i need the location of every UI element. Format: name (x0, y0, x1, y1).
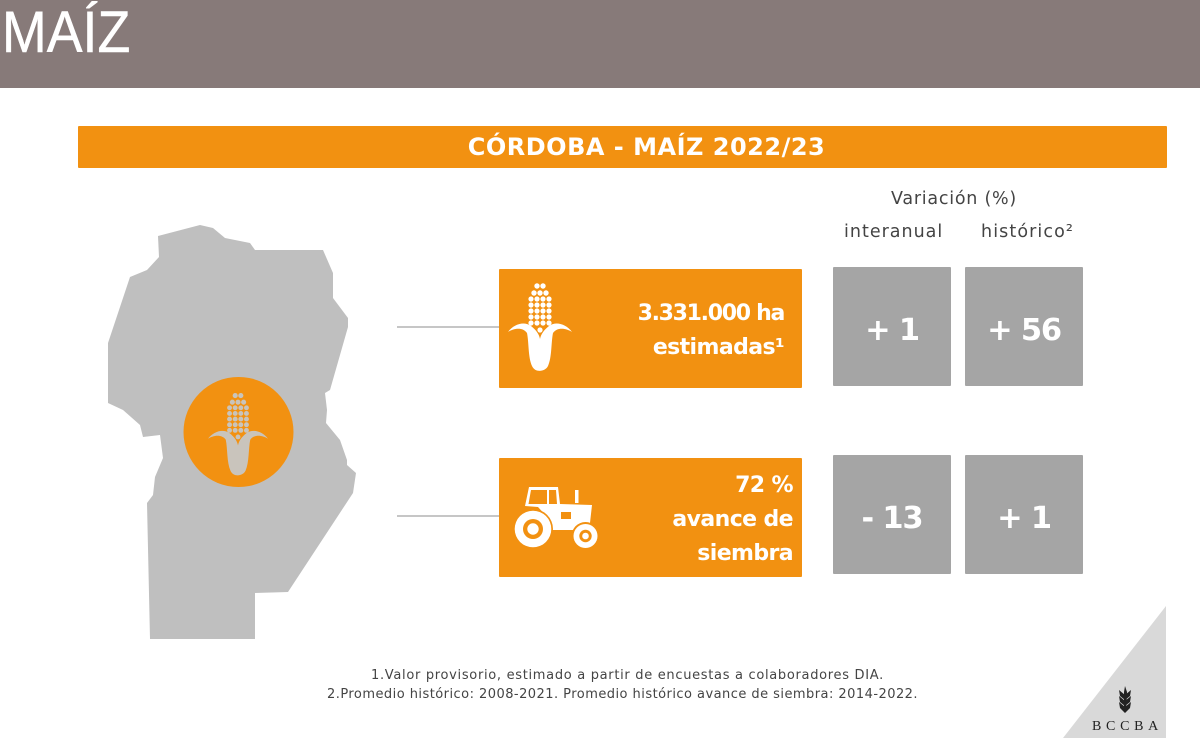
logo triangle and wheat (1063, 606, 1166, 738)
orange title bar: CÓRDOBA - MAÍZ 2022/23 (468, 133, 825, 161)
value box: interanual hectares: + 1 (865, 313, 919, 348)
hectares text: estimadas¹ (653, 335, 784, 360)
value box: histórico progress (965, 455, 1083, 574)
icon: corn (508, 283, 572, 371)
value box: histórico hectares (965, 267, 1083, 386)
orange title bar (78, 126, 1167, 168)
progress text (672, 473, 793, 566)
value box: interanual progress (833, 455, 951, 574)
progress text: avance de (672, 507, 793, 532)
connector line 2 (397, 515, 499, 517)
orange circle badge with corn (184, 377, 294, 487)
value box: histórico hectares: + 56 (987, 313, 1061, 348)
icon: tractor (514, 487, 598, 548)
panel: hectares (499, 269, 802, 388)
page title: MAÍZ (2, 0, 130, 65)
column label: interanual: interanual (844, 222, 943, 242)
footnotes: 1.Valor provisorio, estimado a partir de encuestas a colaboradores DIA. (371, 668, 884, 683)
header band (0, 0, 1200, 88)
variation header: Variación (%) (891, 189, 1017, 209)
footnotes: 2.Promedio histórico: 2008-2021. Promedio histórico avance de siembra: 2014-2022. (327, 687, 918, 702)
value box: interanual progress: - 13 (862, 501, 922, 536)
value box: histórico progress: + 1 (997, 501, 1051, 536)
connector line 1 (397, 326, 499, 328)
column label: histórico: histórico² (981, 222, 1074, 242)
hectares text: 3.331.000 ha (638, 301, 784, 326)
hectares text (638, 301, 784, 360)
footnotes (327, 668, 918, 702)
logo wordmark: BCCBA (1092, 719, 1163, 734)
logo: BCCBA (1063, 606, 1166, 738)
progress text: siembra (697, 541, 793, 566)
panel: planting progress (499, 458, 802, 577)
progress text: 72 % (735, 473, 793, 498)
value box: interanual hectares (833, 267, 951, 386)
